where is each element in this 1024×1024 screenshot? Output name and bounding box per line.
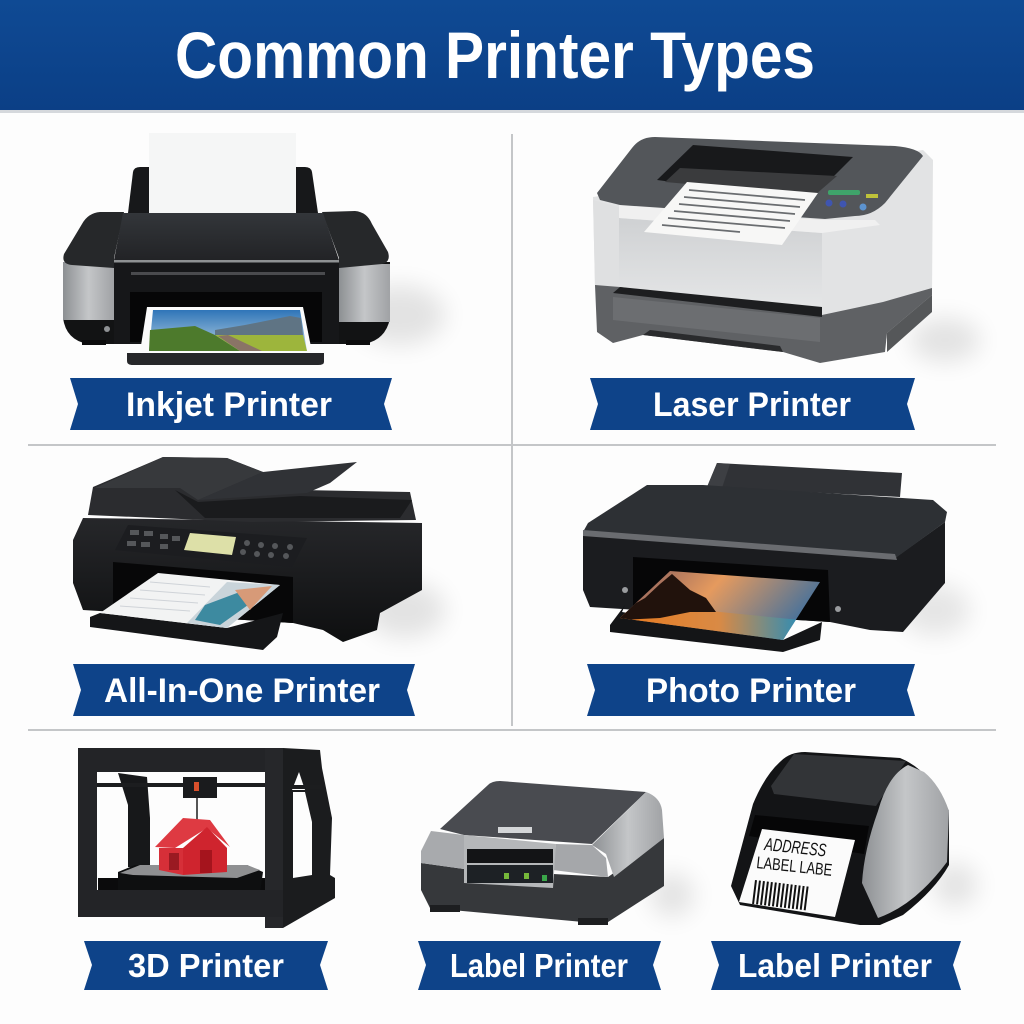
label: label printer two: Label Printer: [738, 947, 932, 984]
label: all-in-one printer: All-In-One Printer: [104, 672, 380, 710]
icon: 3D printer: [78, 748, 335, 928]
label: label printer one: [418, 941, 661, 990]
label: label printer one: Label Printer: [450, 947, 628, 984]
label: inkjet printer: [70, 378, 392, 430]
panel: label printer (desktop): [418, 781, 694, 990]
panel: all-in-one printer: [73, 457, 445, 716]
icon: laser printer: [593, 137, 980, 363]
title: Common Printer Types: [175, 18, 815, 92]
panel: laser printer: [590, 137, 980, 430]
label: 3D printer: 3D Printer: [128, 947, 284, 984]
icon: photo printer: [583, 463, 970, 652]
icon: label printer (desktop): [421, 781, 694, 925]
label: photo printer: [587, 664, 915, 716]
label: all-in-one printer: [73, 664, 415, 716]
label: label printer two: [711, 941, 961, 990]
icon: label printer (address): LABEL LABE: [756, 853, 833, 880]
icon: inkjet printer: [63, 133, 445, 365]
panel: inkjet printer: [63, 133, 445, 430]
label: laser printer: Laser Printer: [653, 386, 851, 424]
label: laser printer: [590, 378, 915, 430]
icon: label printer (address): ADDRESS: [763, 834, 827, 860]
panel: photo printer: [583, 463, 970, 716]
label: photo printer: Photo Printer: [646, 672, 856, 710]
title banner: [0, 0, 1024, 113]
label: inkjet printer: Inkjet Printer: [126, 386, 332, 424]
icon: all-in-one printer: [73, 457, 445, 650]
label: 3D printer: [84, 941, 328, 990]
panel: 3D printer: [78, 748, 335, 990]
panel: label printer (address): [711, 752, 977, 990]
icon: label printer (address): [731, 752, 977, 925]
